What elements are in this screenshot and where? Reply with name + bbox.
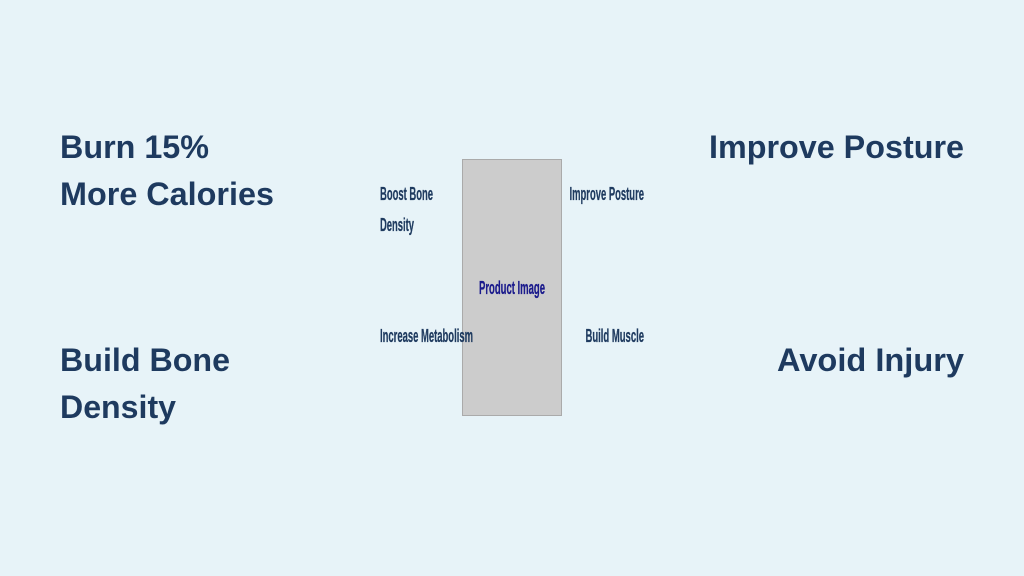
label: boost bone density: Density [380,215,414,235]
benefit heading: improve posture: Improve Posture [709,129,964,165]
benefit heading: bone density: Build Bone [60,342,230,378]
label: boost bone density [380,184,433,235]
benefit heading: burn calories [60,129,274,212]
benefit heading: bone density [60,342,230,425]
label: boost bone density: Boost Bone [380,184,433,204]
label: increase metabolism: Increase Metabolism [380,326,473,346]
label: build muscle: Build Muscle [586,326,644,346]
product image placeholder [462,160,562,416]
benefit heading: burn calories: Burn 15% [60,129,209,165]
benefit heading: avoid injury: Avoid Injury [777,342,964,378]
label: improve posture: Improve Posture [570,184,644,204]
benefit heading: bone density: Density [60,389,176,425]
product image label: Product Image [479,278,545,298]
benefit heading: burn calories: More Calories [60,176,274,212]
